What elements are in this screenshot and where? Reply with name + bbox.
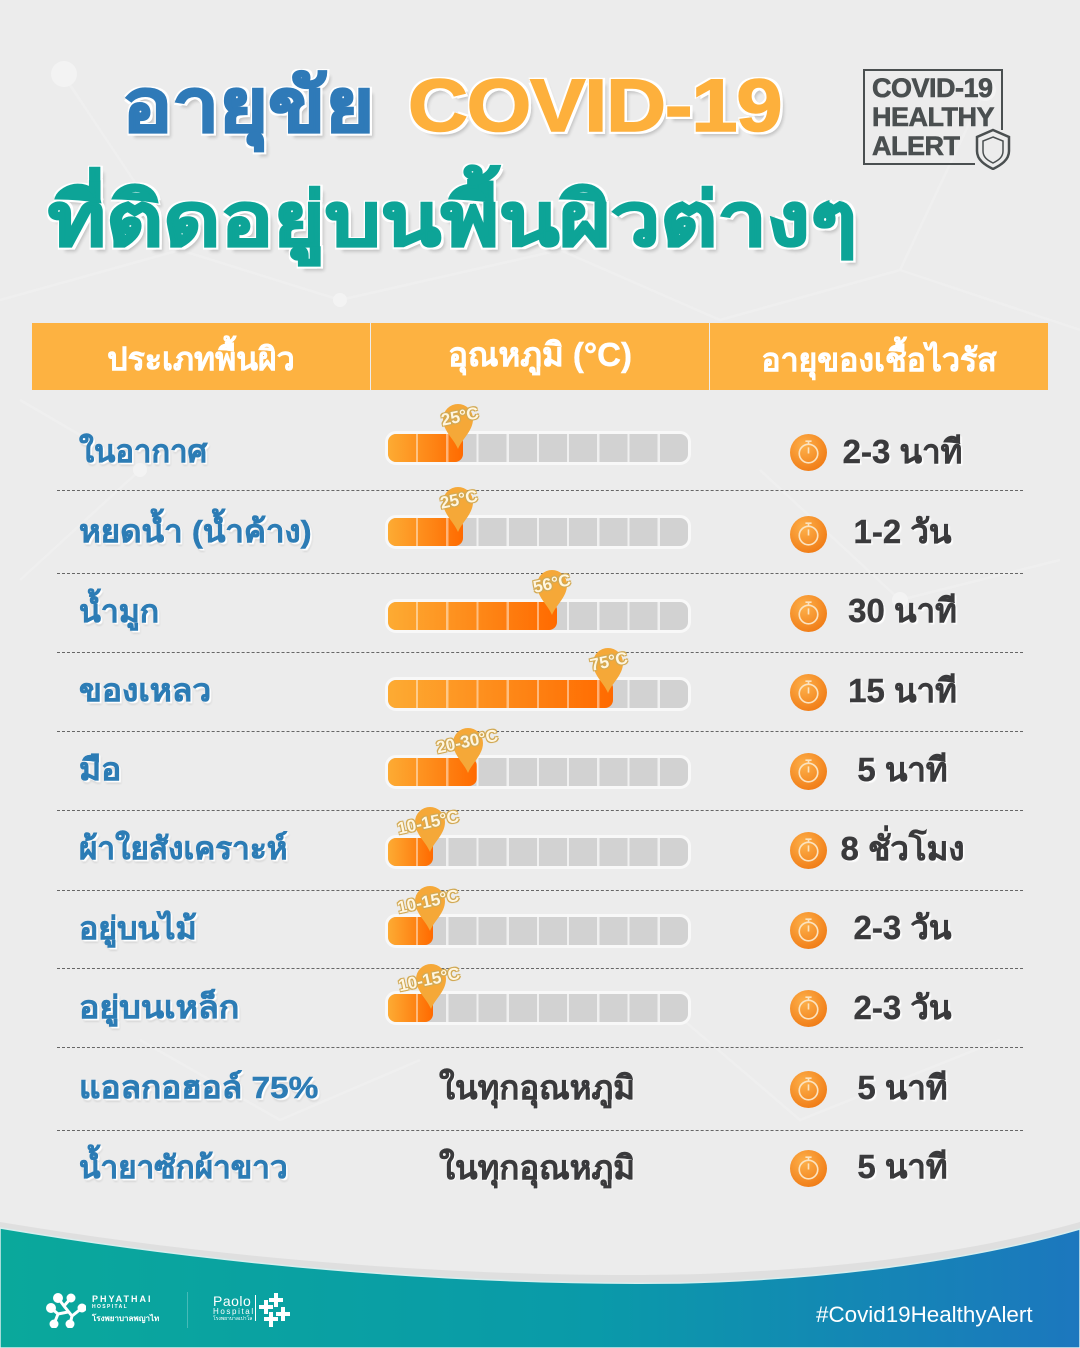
logo: Phyathai Hospital: HOSPITAL [92, 1304, 128, 1310]
row 8 duration: 2-3 วัน [854, 989, 951, 1026]
row 3 pin label: 56°C [531, 570, 572, 597]
row 4 timer icon [790, 674, 827, 711]
logo: Paolo Hospital: โรงพยาบาลเปาโล [213, 1316, 252, 1322]
row 6 label: ผ้าใยสังเคราะห์ [79, 831, 287, 866]
row 8 timer icon [790, 990, 827, 1027]
row 4 pin label: 75°C [588, 648, 629, 675]
header: surface type: ประเภทพื้นผิว [107, 341, 295, 377]
row 6 bar 10-15C [385, 835, 691, 869]
logo: Paolo Hospital [187, 1292, 297, 1328]
row 10 timer icon [790, 1150, 827, 1187]
row 7 timer icon [790, 912, 827, 949]
row 5 timer icon [790, 753, 827, 790]
title line 1: COVID-19: COVID-19 [408, 64, 781, 147]
row 7 label: อยู่บนไม้ [79, 911, 197, 946]
row 2 pin label: 25°C [438, 486, 479, 513]
row 2 duration: 1-2 วัน [854, 513, 951, 550]
row 10 duration: 5 นาที [857, 1148, 948, 1185]
row 8 label: อยู่บนเหล็ก [79, 990, 239, 1025]
row 3 duration: 30 นาที [848, 592, 957, 629]
row 8 pin [416, 964, 446, 1009]
row 6 duration: 8 ชั่วโมง [840, 830, 965, 867]
row 6 timer icon [790, 832, 827, 869]
row 2 bar 25C [385, 515, 691, 549]
row 9 duration: 5 นาที [857, 1069, 948, 1106]
row 10 temperature text: ในทุกอุณหภูมิ [439, 1149, 635, 1186]
badge: COVID-19 Healthy Alert [863, 69, 1010, 170]
row 7 bar 10-15C [385, 914, 691, 948]
row 7 duration: 2-3 วัน [854, 909, 951, 946]
row 3 bar 56C [385, 599, 691, 633]
row 2 timer icon [790, 516, 827, 553]
row 1 label: ในอากาศ [79, 434, 207, 469]
logo: Phyathai Hospital: โรงพยาบาลพญาไท [92, 1314, 159, 1323]
header: virus lifespan: อายุของเชื้อไวรัส [761, 342, 997, 378]
row 8 bar 10-15C [385, 991, 691, 1025]
hashtag: #Covid19HealthyAlert [816, 1302, 1033, 1327]
title line 2: ที่ติดอยู่บนพื้นผิวต่างๆ [48, 178, 857, 261]
table header [32, 323, 1048, 390]
badge: COVID-19 Healthy Alert: COVID-19 [872, 73, 993, 103]
row 1 pin label: 25°C [439, 403, 480, 430]
row 1 pin [443, 404, 473, 449]
row 9 temperature text: ในทุกอุณหภูมิ [439, 1069, 635, 1106]
row 3 pin [537, 570, 567, 615]
header: temperature: อุณหภูมิ (°C) [448, 336, 632, 373]
row 1 duration: 2-3 นาที [843, 433, 962, 470]
badge: COVID-19 Healthy Alert: HEALTHY [872, 102, 994, 132]
row 4 pin [593, 648, 623, 693]
row 9 timer icon [790, 1071, 827, 1108]
row 1 bar 25C [385, 431, 691, 465]
row 5 duration: 5 นาที [857, 751, 948, 788]
row 7 pin [415, 886, 445, 931]
row 2 pin [443, 487, 473, 532]
logo: Paolo Hospital: Paolo [213, 1293, 251, 1309]
header: virus lifespan [710, 323, 1048, 390]
logo: Phyathai Hospital: PHYATHAI [92, 1294, 153, 1304]
badge: COVID-19 Healthy Alert: ALERT [872, 131, 960, 161]
row 7 pin label: 10-15°C [396, 886, 461, 917]
row 5 bar 20-30C [385, 755, 691, 789]
header: surface type [32, 323, 370, 390]
row 5 pin [454, 728, 483, 773]
row 2 label: หยดน้ำ (น้ำค้าง) [79, 514, 312, 549]
row 9 label: แอลกอฮอล์ 75% [79, 1070, 318, 1105]
title line 1: lifespan: อายุขัย [122, 64, 374, 147]
row 3 label: น้ำมูก [79, 594, 159, 629]
row 6 pin label: 10-15°C [396, 807, 461, 838]
row 8 pin label: 10-15°C [397, 964, 462, 995]
logo: Paolo Hospital: Hospital [213, 1307, 255, 1316]
row 4 duration: 15 นาที [848, 672, 957, 709]
row 1 timer icon [790, 434, 827, 471]
row 6 pin [415, 807, 445, 852]
row 4 bar 75C [385, 677, 691, 711]
header: temperature [371, 323, 709, 390]
row 5 pin label: 20-30°C [435, 726, 500, 757]
row 5 label: มือ [79, 752, 121, 787]
row 4 label: ของเหลว [79, 673, 211, 708]
logo: Phyathai Hospital [46, 1293, 159, 1328]
row 10 label: น้ำยาซักผ้าขาว [79, 1150, 288, 1185]
row 3 timer icon [790, 595, 827, 632]
